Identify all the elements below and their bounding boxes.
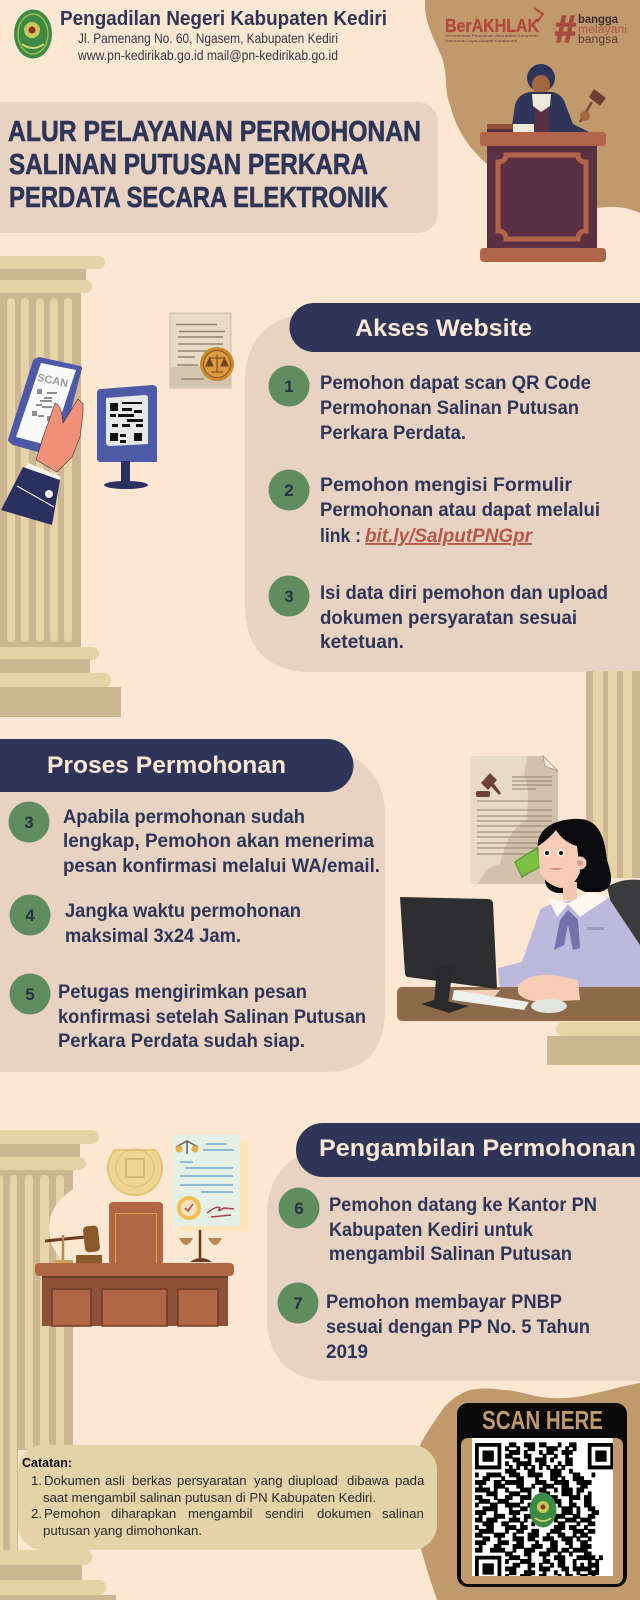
label: SCAN HERE: SCAN HERE (482, 1405, 603, 1435)
step 6 (278, 1188, 597, 1265)
QR code (475, 1443, 614, 1582)
step 6: mengambil Salinan Putusan (329, 1244, 572, 1265)
step 4: Jangka waktu permohonan (65, 901, 301, 922)
panel: Pengambilan Permohonan (267, 1123, 640, 1381)
court name and address: Jl. Pamenang No. 60, Ngasem, Kabupaten Kediri (78, 30, 338, 46)
title: PERDATA SECARA ELEKTRONIK (9, 182, 388, 214)
logo: bangga melayani bangsa: bangsa (578, 34, 619, 46)
icon: hand holding phone with SCAN screen: SCAN (36, 372, 69, 390)
step 5: konfirmasi setelah Salinan Putusan (58, 1007, 366, 1028)
step 2: link : (320, 526, 361, 547)
step 5: Petugas mengirimkan pesan (58, 982, 307, 1003)
step 3: dokumen persyaratan sesuai (320, 608, 577, 629)
note 2: 2. (31, 1506, 42, 1521)
panel: Akses Website (245, 303, 640, 672)
logo: bangga melayani bangsa: bangga (578, 14, 619, 26)
heading: Proses Permohonan: Proses Permohonan (47, 752, 286, 779)
logo: BerAKHLAK: Berorientasi Pelayanan Akuntabel Kompeten (445, 34, 539, 38)
step 7: Pemohon membayar PNBP (326, 1292, 562, 1313)
step 7: 2019 (326, 1342, 368, 1363)
title: SALINAN PUTUSAN PERKARA (9, 149, 368, 181)
note 1: 1. (31, 1473, 42, 1488)
step 6: 6 (294, 1199, 304, 1218)
step 2: Permohonan atau dapat melalui (320, 500, 600, 521)
step 5: Perkara Perdata sudah siap. (58, 1031, 305, 1052)
logo: bangga melayani bangsa (555, 9, 627, 51)
step 3: 3 (284, 587, 294, 606)
note 2: dokumen (317, 1506, 371, 1521)
title (8, 116, 421, 214)
step 7: 7 (293, 1294, 303, 1313)
step 5: 5 (25, 985, 35, 1004)
title panel (0, 102, 438, 233)
note 1 (31, 1473, 425, 1505)
note 1: asli (105, 1473, 125, 1488)
blob: bottom right (420, 1383, 640, 1600)
step 1 (268, 366, 591, 444)
note 2: salinan (382, 1506, 424, 1521)
title: ALUR PELAYANAN PERMOHONAN (8, 116, 421, 148)
step 3 (8, 802, 380, 877)
step 3: Apabila permohonan sudah (63, 807, 305, 828)
step 7: sesuai dengan PP No. 5 Tahun (326, 1317, 590, 1338)
note 1: persyaratan (177, 1473, 247, 1488)
QR card: Scan Here (457, 1403, 627, 1587)
logo: BerAKHLAK: BerAKHLAK (445, 16, 539, 36)
step 4 (10, 894, 301, 947)
step 6: Pemohon datang ke Kantor PN (329, 1195, 597, 1216)
judge at podium (480, 64, 606, 262)
step 7 (278, 1282, 590, 1363)
step 4: 4 (25, 906, 35, 925)
emblem in QR (530, 1492, 556, 1528)
step 2: 2 (284, 481, 294, 500)
logo: bangga melayani bangsa: melayani (578, 24, 627, 36)
emblem: court logo (14, 10, 52, 58)
step 1: Perkara Perdata. (320, 423, 466, 444)
note 2 (31, 1506, 424, 1538)
note 2: diharapkan (111, 1506, 176, 1521)
note 1: dibawa (347, 1473, 389, 1488)
step 2: bit.ly/SalputPNGpr (365, 526, 534, 547)
step 1: Pemohon dapat scan QR Code (320, 373, 591, 394)
note 2: putusan yang dimohonkan. (43, 1523, 202, 1538)
note 1: saat mengambil salinan putusan di PN Kabupaten Kediri. (43, 1490, 376, 1505)
blob: top right (425, 0, 640, 213)
heading: Pengambilan Permohonan (296, 1123, 640, 1177)
notes heading: Catatan: (22, 1455, 72, 1470)
step 5 (10, 974, 366, 1052)
step 2 (268, 470, 600, 547)
icon: legal document with gavel (470, 756, 558, 884)
panel: notes (18, 1445, 437, 1550)
column: left upper (0, 256, 121, 717)
note 1: yang (254, 1473, 283, 1488)
note 1: pada (395, 1473, 425, 1488)
note 2: mengambil (188, 1506, 253, 1521)
note 1: berkas (132, 1473, 172, 1488)
step 3: ketetuan. (320, 632, 404, 653)
note 2: sendiri (265, 1506, 304, 1521)
court name and address: www.pn-kedirikab.go.id mail@pn-kedirikab.go.id (77, 47, 338, 63)
step 6: Kabupaten Kediri untuk (329, 1220, 533, 1241)
logo: BerAKHLAK: Harmonis Loyal Adaptif Kolaboratif (445, 39, 517, 43)
step 1: Permohonan Salinan Putusan (320, 398, 579, 419)
icon: hand holding phone with SCAN screen (1, 359, 83, 525)
court name and address (60, 7, 387, 63)
column: left lower (0, 1130, 116, 1600)
step 1: 1 (284, 377, 294, 396)
icon: document with seal (170, 313, 234, 388)
heading: Pengambilan Permohonan: Pengambilan Permohonan (319, 1135, 636, 1162)
step 3: Isi data diri pemohon dan upload (320, 583, 608, 604)
step 3: pesan konfirmasi melalui WA/email. (63, 856, 380, 877)
court name and address: Pengadilan Negeri Kabupaten Kediri (60, 7, 387, 30)
heading: Akses Website (290, 303, 640, 352)
panel: Proses Permohonan (0, 739, 385, 1072)
column: right middle (547, 671, 640, 1065)
step 3: 3 (24, 813, 34, 832)
step 3: lengkap, Pemohon akan menerima (63, 831, 374, 852)
heading: Proses Permohonan (0, 739, 354, 792)
note 1: Dokumen (44, 1473, 100, 1488)
illustration: woman at computer (397, 819, 640, 1021)
logo: bangga melayani bangsa: # (555, 9, 576, 51)
note 1: diupload (288, 1473, 338, 1488)
logo: BerAKHLAK (445, 8, 543, 43)
note 2: Pemohon (44, 1506, 100, 1521)
icon: QR code stand (97, 385, 157, 489)
heading: Akses Website: Akses Website (355, 315, 532, 342)
illustration: court desk with gavel, seal and document (35, 1135, 248, 1326)
step 4: maksimal 3x24 Jam. (65, 926, 241, 947)
step 2: Pemohon mengisi Formulir (320, 475, 573, 496)
step 3 (268, 576, 608, 653)
